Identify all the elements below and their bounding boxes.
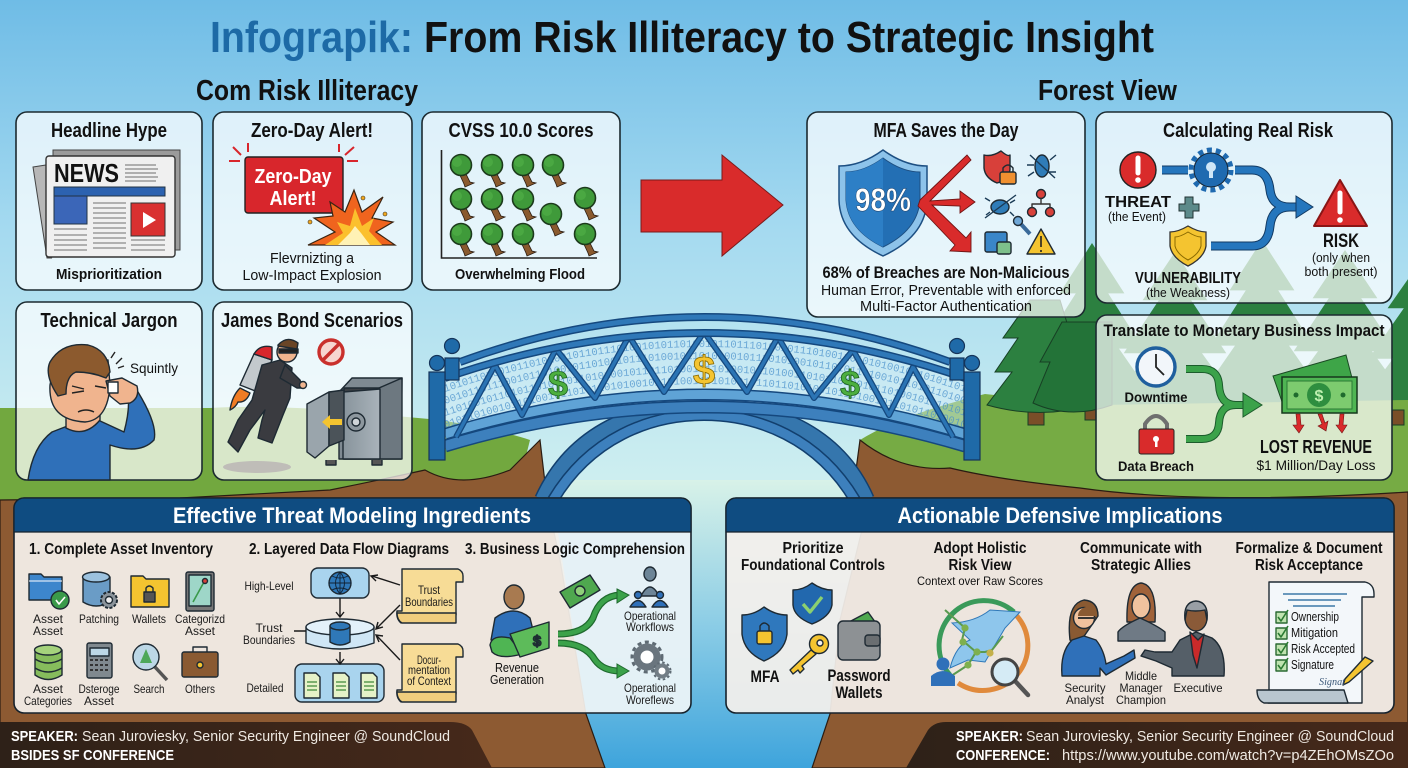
text: stats: Multi-Factor Authentication xyxy=(860,298,1032,315)
icon: documentation scroll xyxy=(397,644,463,702)
section: asset inventory xyxy=(24,572,225,708)
caption: Misprioritization xyxy=(56,266,162,283)
labels: Wallets xyxy=(836,683,882,702)
labels row 1: Asset xyxy=(33,612,64,626)
caption: Low-Impact Explosion xyxy=(242,267,382,284)
footer: speaker left xyxy=(0,722,492,768)
arrow: to risk xyxy=(1162,170,1313,246)
label: risk: RISK xyxy=(1323,231,1359,252)
deck xyxy=(445,394,965,446)
background: left land xyxy=(0,407,605,768)
icons: threats xyxy=(984,151,1056,254)
icon: signed scroll xyxy=(1257,582,1374,703)
truss backing with binary: 0101101001011010010110101101010010110100110101001011011010100101101001011010110100101101011010 xyxy=(446,377,964,428)
arrows xyxy=(294,575,400,664)
label: threat: (the Event) xyxy=(1108,209,1166,224)
labels row 1 xyxy=(33,612,225,638)
heading: CVSS 10.0 Scores xyxy=(448,120,594,142)
label: threat: THREAT xyxy=(1105,194,1171,211)
label: vulnerability xyxy=(1135,270,1241,300)
heading: Calculating Real Risk xyxy=(1163,120,1334,142)
label: lost revenue xyxy=(1256,437,1376,473)
label: risk xyxy=(1304,231,1378,279)
panel: Zero-Day Alert xyxy=(213,112,412,290)
title: From Risk Illiteracy to Strategic Insight xyxy=(424,13,1154,62)
background: foreground pines xyxy=(987,300,1404,425)
icon: explosion xyxy=(308,190,395,245)
label: workflows xyxy=(624,609,676,634)
label: security analyst: Security xyxy=(1064,681,1106,695)
tint over water xyxy=(558,533,690,712)
heading xyxy=(1236,540,1383,574)
checklist text: Risk Accepted xyxy=(1291,641,1355,656)
footer: speaker left: Sean Juroviesky, Senior Security Engineer @ SoundCloud xyxy=(82,728,450,745)
labels xyxy=(750,666,890,702)
icon: database disk xyxy=(306,619,374,649)
icon: floating money xyxy=(560,575,600,608)
background: forest xyxy=(1022,240,1408,416)
icon: dollar signs: $ xyxy=(840,363,860,404)
heading: Adopt Holistic xyxy=(934,540,1027,557)
icon: stacked database xyxy=(34,645,62,680)
caption xyxy=(242,250,382,284)
heading: Zero-Day Alert! xyxy=(251,120,373,142)
arrows: deflection xyxy=(918,155,975,252)
label: vulnerability: (the Weakness) xyxy=(1146,285,1230,300)
label: security analyst xyxy=(1064,681,1106,707)
icon: gear with keyhole xyxy=(1191,150,1231,190)
labels: Password xyxy=(828,666,890,685)
labels row 2: Dsteroge xyxy=(78,682,120,696)
panel: CVSS scores xyxy=(422,112,620,290)
background: water xyxy=(500,480,920,768)
section: business logic xyxy=(490,567,676,707)
icon: gears xyxy=(632,642,670,680)
labels xyxy=(243,579,295,695)
panel: Effective Threat Modeling Ingredients xyxy=(14,498,691,713)
labels row 1: Patching xyxy=(79,612,119,626)
icon: globe box xyxy=(311,568,369,598)
heading: Formalize & Document xyxy=(1236,540,1383,557)
chart: tree scatter xyxy=(442,150,598,258)
label: lost revenue: $1 Million/Day Loss xyxy=(1256,457,1376,473)
icon: alert sign: Zero-Day xyxy=(254,166,332,188)
heading: MFA Saves the Day xyxy=(874,120,1019,142)
labels row 1: Wallets xyxy=(132,612,166,626)
icon: security analyst xyxy=(1062,600,1135,676)
checklist text: Mitigation xyxy=(1291,625,1338,640)
icon: money xyxy=(1273,355,1357,433)
truss backing with binary: 0010110111001011010010110100101110100101101010010111010100101101011010010110101101001011011010 xyxy=(446,352,964,404)
heading: Prioritize xyxy=(782,540,844,557)
label: vulnerability: VULNERABILITY xyxy=(1135,270,1241,287)
truss backing with binary xyxy=(446,337,964,439)
top chords xyxy=(445,317,965,378)
icon: prohibited sign xyxy=(319,340,343,364)
arrows: revenue flows fill xyxy=(558,595,620,671)
icon: revenue person: $ xyxy=(533,633,542,650)
arrow: to lost revenue xyxy=(1186,369,1262,439)
icon: jetpack spy xyxy=(223,339,306,473)
icon: trust boundaries scroll: Boundaries xyxy=(405,595,453,609)
icon: folder lock xyxy=(131,576,169,607)
arrow: red transition arrow xyxy=(641,155,783,256)
icon: plus xyxy=(1179,197,1199,218)
footer: speaker right: SPEAKER: xyxy=(956,728,1023,745)
heading: Foundational Controls xyxy=(741,557,885,574)
panel: Actionable Defensive Implications xyxy=(726,498,1394,713)
heading: Com Risk Illiteracy: Com Risk Illiteracy xyxy=(196,75,418,107)
icon: dollar signs: $ xyxy=(548,363,568,404)
arrowheads xyxy=(617,589,629,678)
label: middle manager xyxy=(1116,669,1166,707)
icon: team xyxy=(630,567,668,607)
truss backing with binary: 1010110100101101010010110111010010101101001011011101001011101001101010100101101011010110101101 xyxy=(446,340,964,392)
icon: trust boundaries scroll: Trust xyxy=(418,583,441,597)
icon: money: $ xyxy=(1315,388,1324,405)
labels: Boundaries xyxy=(243,633,295,647)
icon: key xyxy=(790,634,828,674)
heading: Headline Hype xyxy=(51,120,167,142)
footer: speaker left: SPEAKER: xyxy=(11,728,78,745)
label: Squintly xyxy=(130,360,178,376)
icon: padlock xyxy=(1139,416,1174,454)
text: stats xyxy=(821,263,1071,315)
icon: database gear xyxy=(82,572,117,608)
label: data breach: Data Breach xyxy=(1118,458,1194,474)
icon: documentation scroll: of Context xyxy=(407,674,452,688)
labels row 2: Others xyxy=(185,682,215,696)
subheads: 1. Complete Asset Inventory xyxy=(29,541,213,558)
footer: speaker right: Sean Juroviesky, Senior Security Engineer @ SoundCloud xyxy=(1026,728,1394,745)
icon: holistic map xyxy=(931,601,1028,695)
truss backing with binary: 1101001011010110100101101010010110110100101101001011010011010110100101101001011101010010110101 xyxy=(446,365,964,416)
label: workflows 2 xyxy=(624,681,676,707)
section: data flow diagram xyxy=(243,568,463,702)
text: stats: 68% of Breaches are Non-Malicious xyxy=(822,263,1070,282)
checklist text: Ownership xyxy=(1291,609,1339,624)
column: risk acceptance xyxy=(1236,540,1383,703)
icon: newspaper: NEWS xyxy=(54,158,119,188)
label: workflows 2: Operational xyxy=(624,681,676,695)
labels row 1: Asset xyxy=(33,624,64,638)
label: risk: both present) xyxy=(1304,264,1378,279)
panel: Technical Jargon xyxy=(16,302,202,480)
label: risk: (only when xyxy=(1312,250,1370,265)
icon: clock xyxy=(1137,348,1175,386)
checklist text: Signat xyxy=(1319,676,1346,688)
icon: documents box xyxy=(295,664,384,702)
icon: newspaper xyxy=(33,150,180,258)
icon: executive xyxy=(1141,601,1224,676)
labels: High-Level xyxy=(244,579,294,593)
heading: James Bond Scenarios xyxy=(221,310,403,332)
header bar: Effective Threat Modeling Ingredients xyxy=(173,503,531,528)
icon: dollar signs xyxy=(548,349,860,404)
icon: shield 98%: 98% xyxy=(855,182,911,218)
end posts xyxy=(429,338,980,460)
footer: speaker right: CONFERENCE: xyxy=(956,747,1050,764)
labels row 2: Categories xyxy=(24,694,72,708)
icon: mfa shield xyxy=(742,607,787,661)
column: foundational controls xyxy=(741,540,890,702)
icon: alert sign: Alert! xyxy=(270,188,316,210)
header bar xyxy=(726,498,1394,532)
header bar xyxy=(14,498,691,532)
label: workflows: Operational xyxy=(624,609,676,623)
icon: alert sign xyxy=(229,143,358,213)
label: executive: Executive xyxy=(1174,681,1223,695)
icon: documentation scroll: Docur- xyxy=(417,653,441,667)
labels: Trust xyxy=(256,621,283,635)
labels row 2: Asset xyxy=(84,694,115,708)
caption: Overwhelming Flood xyxy=(455,266,585,283)
checklist text: Signature xyxy=(1291,657,1334,672)
icon: squinting person xyxy=(28,345,155,480)
footer: speaker left: BSIDES SF CONFERENCE xyxy=(11,747,174,764)
heading xyxy=(741,540,885,574)
label: security analyst: Analyst xyxy=(1066,693,1105,707)
label: revenue generation: Generation xyxy=(490,672,544,687)
icon: open safe xyxy=(307,378,402,465)
labels: Detailed xyxy=(246,681,284,695)
label: threat xyxy=(1105,194,1171,224)
arrows: revenue flows xyxy=(558,595,620,671)
label: lost revenue: LOST REVENUE xyxy=(1260,437,1372,457)
label: revenue generation xyxy=(490,660,544,687)
subheads xyxy=(29,541,685,558)
label: revenue generation: Revenue xyxy=(495,660,539,675)
icon: check shield xyxy=(793,583,832,624)
icon: shield 98% xyxy=(839,150,927,256)
background: right land xyxy=(812,394,1408,768)
icon: revenue person xyxy=(490,585,549,657)
subheads: 2. Layered Data Flow Diagrams xyxy=(249,541,449,558)
icon: briefcase xyxy=(182,647,218,677)
truss diagonals xyxy=(456,332,953,437)
heading: Context over Raw Scores xyxy=(917,574,1043,588)
bridge arch xyxy=(544,408,865,500)
label: workflows 2: Woreflews xyxy=(626,693,674,707)
footer: speaker right xyxy=(906,722,1408,768)
icon: folder check xyxy=(29,574,69,609)
panel: James Bond Scenarios xyxy=(213,302,412,480)
icon: tablet xyxy=(186,572,214,611)
icon: dollar signs: $ xyxy=(693,349,715,393)
flow lines xyxy=(1162,170,1296,246)
labels row 1: Asset xyxy=(185,624,216,638)
label: downtime: Downtime xyxy=(1124,389,1188,405)
icon: calculator xyxy=(87,643,112,678)
icon: vulnerability shield xyxy=(1170,226,1206,266)
heading: Technical Jargon xyxy=(40,310,178,332)
icon: threat xyxy=(1120,152,1156,188)
icon: trust boundaries scroll xyxy=(397,569,463,623)
labels: MFA xyxy=(750,667,780,686)
icon: wallet xyxy=(838,612,880,660)
labels row 2 xyxy=(24,682,215,708)
heading: Communicate with xyxy=(1080,540,1202,557)
heading: Strategic Allies xyxy=(1091,557,1191,574)
heading xyxy=(1080,540,1202,574)
panel: Monetary Business Impact xyxy=(1096,315,1392,480)
header bar: Actionable Defensive Implications xyxy=(898,503,1222,528)
labels row 2: Search xyxy=(134,682,164,696)
label: workflows: Workflows xyxy=(626,620,674,634)
illustration: binary bridge xyxy=(428,313,981,498)
icon: risk warning xyxy=(1314,180,1367,226)
text: stats: Human Error, Preventable with enforced xyxy=(821,282,1071,299)
panel: Calculating Real Risk xyxy=(1096,112,1392,303)
heading: Risk View xyxy=(948,557,1012,574)
subheads: 3. Business Logic Comprehension xyxy=(465,541,685,558)
heading: Forest View: Forest View xyxy=(1038,75,1177,107)
caption: Flevrnizting a xyxy=(270,250,355,267)
label: middle manager: Manager xyxy=(1120,681,1162,695)
footer: speaker right: https://www.youtube.com/watch?v=p4ZEhOMsZOo xyxy=(1062,747,1394,764)
column: strategic allies xyxy=(1062,540,1224,707)
title: Infograpik: xyxy=(210,13,413,62)
label: middle manager: Middle xyxy=(1125,669,1157,683)
labels row 2: Asset xyxy=(33,682,64,696)
column: holistic risk view xyxy=(917,540,1043,695)
labels row 1: Categorizd xyxy=(175,612,225,626)
panel: Headline Hype xyxy=(16,112,202,290)
icon: manager xyxy=(1118,583,1165,641)
checklist text xyxy=(1291,609,1355,688)
icon: magnifier xyxy=(133,644,167,680)
label: middle manager: Champion xyxy=(1116,693,1166,707)
icon: documentation scroll: mentation xyxy=(408,663,450,677)
heading xyxy=(917,540,1043,588)
panel: MFA Saves the Day xyxy=(807,112,1085,317)
heading: Risk Acceptance xyxy=(1255,557,1363,574)
